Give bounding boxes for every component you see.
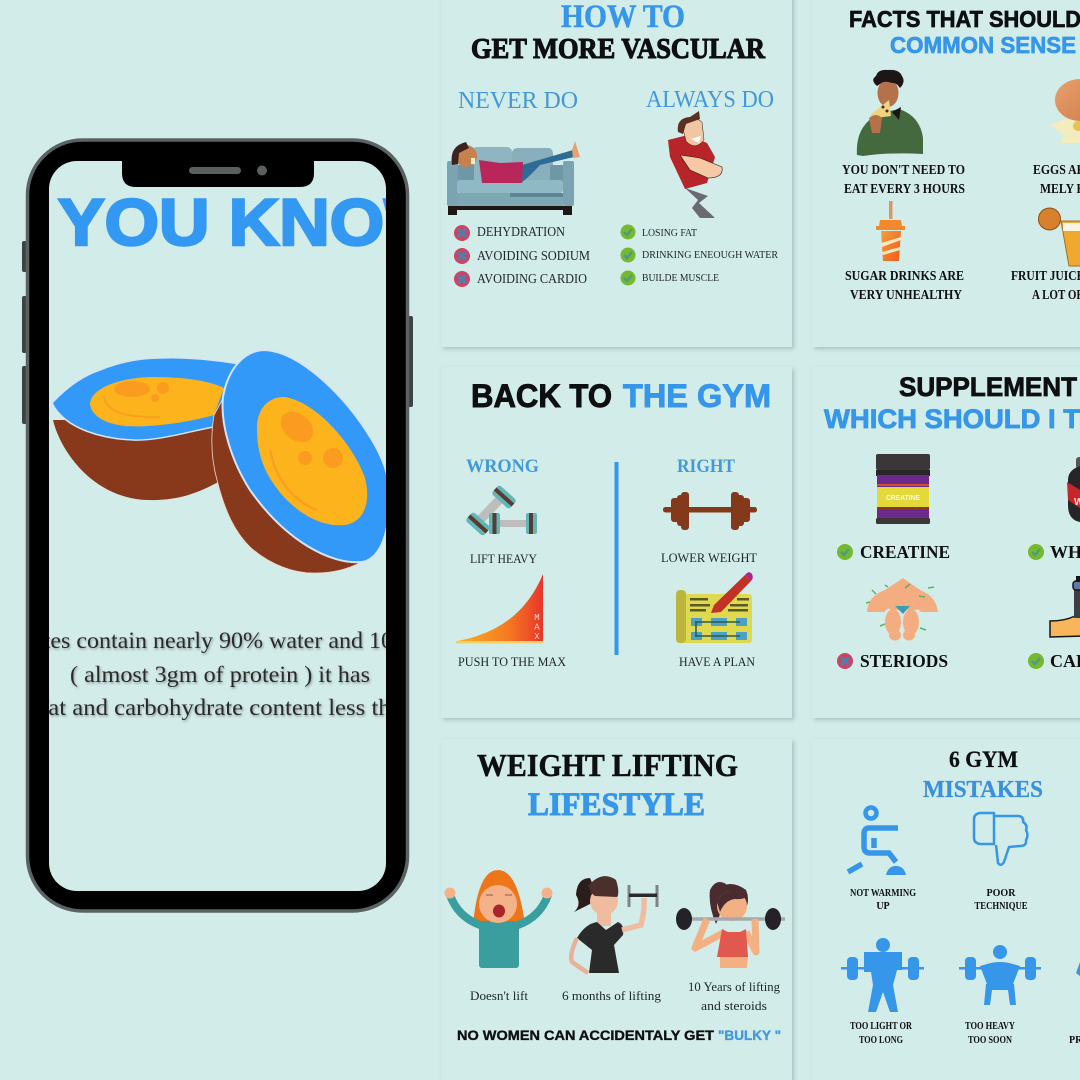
never do labels: DEHYDRATION bbox=[477, 225, 565, 240]
chart: max ramp bbox=[456, 574, 543, 644]
never do labels: AVOIDING SODIUM bbox=[477, 249, 590, 264]
illustration: soda cup bbox=[876, 201, 905, 261]
text: poor technique bbox=[974, 888, 1028, 912]
list: always do bbox=[620, 224, 779, 286]
illustration: woman after 10 years bbox=[676, 882, 785, 968]
illustration: steroid body bbox=[866, 578, 938, 640]
icon: lifter too heavy bbox=[959, 945, 1041, 1005]
heading: HOW TO bbox=[561, 0, 685, 35]
column headings bbox=[466, 456, 735, 477]
text: no need to eat every 3 hours bbox=[842, 163, 965, 197]
illustration: man eating pizza bbox=[857, 70, 923, 156]
text: sugar drinks bbox=[845, 269, 964, 303]
icon: barbell bbox=[663, 492, 757, 530]
phone body bbox=[28, 140, 408, 911]
icon: clipped lifter bbox=[1076, 962, 1080, 976]
phone screen content bbox=[49, 198, 386, 722]
panel: facts that should be common sense bbox=[812, 0, 1080, 347]
text: too heavy too soon bbox=[965, 1021, 1016, 1046]
panel background bbox=[812, 739, 1080, 1080]
icon: lifter too light bbox=[841, 938, 924, 1012]
heading bbox=[923, 747, 1043, 803]
illustration: halved egg bbox=[52, 350, 390, 573]
text: 10 years of lifting and steroids bbox=[688, 979, 780, 1013]
chart: max ramp: A bbox=[534, 622, 540, 632]
text: poor technique: POOR bbox=[987, 888, 1016, 899]
label: whey bbox=[1028, 542, 1080, 562]
text: too light or too long: TOO LIGHT OR bbox=[850, 1021, 913, 1032]
illustration: muscular man bbox=[668, 111, 722, 218]
illustration: fruit juice bbox=[1038, 208, 1080, 266]
text: 10 years of lifting and steroids: 10 Years of lifting bbox=[688, 979, 780, 994]
chart: max ramp: M bbox=[534, 613, 540, 623]
always do labels: LOSING FAT bbox=[642, 227, 697, 239]
heading: GET MORE VASCULAR bbox=[471, 33, 766, 65]
panel background bbox=[441, 367, 792, 718]
text: doesn't lift: Doesn't lift bbox=[470, 988, 528, 1003]
never do labels bbox=[477, 225, 590, 287]
phone notch bbox=[122, 160, 314, 187]
phone speaker bbox=[189, 167, 241, 174]
screen heading: YOU KNOW bbox=[58, 185, 451, 259]
heading: 6 GYM bbox=[949, 747, 1018, 772]
heading: THE GYM bbox=[623, 378, 771, 414]
heading: LIFESTYLE bbox=[528, 787, 705, 823]
heading: MISTAKES bbox=[923, 777, 1043, 803]
text: sugar drinks: SUGAR DRINKS ARE bbox=[845, 269, 964, 284]
panel background bbox=[441, 0, 792, 347]
illustration: egg bbox=[1050, 79, 1080, 143]
text: no need to eat every 3 hours: EAT EVERY 3 HOURS bbox=[844, 182, 965, 197]
chart: max ramp: X bbox=[534, 632, 540, 642]
heading: COMMON SENSE bbox=[890, 32, 1076, 58]
panel background bbox=[812, 0, 1080, 347]
text: not warming up bbox=[850, 888, 916, 912]
panel background bbox=[812, 367, 1080, 718]
never do items bbox=[454, 225, 470, 287]
illustration: arm with dumbbell bbox=[1050, 576, 1080, 637]
panel: 6 gym mistakes bbox=[812, 739, 1080, 1080]
text: too heavy too soon: TOO SOON bbox=[968, 1035, 1013, 1046]
text: lower weight: LOWER WEIGHT bbox=[661, 550, 757, 565]
phone camera bbox=[257, 166, 267, 176]
label: steroids: STERIODS bbox=[860, 651, 948, 671]
heading: BACK TO bbox=[471, 378, 612, 414]
icon: dumbbells bbox=[465, 485, 537, 536]
callout: no women get bulky: NO WOMEN CAN ACCIDENTALY GET bbox=[457, 1028, 715, 1043]
screen body text: ( almost 3gm of protein ) it has bbox=[70, 662, 370, 687]
icon: plan with pencil bbox=[676, 572, 753, 643]
text: not warming up: NOT WARMING bbox=[850, 888, 916, 899]
text: have a plan: HAVE A PLAN bbox=[679, 654, 756, 669]
text: too heavy too soon: TOO HEAVY bbox=[965, 1021, 1016, 1032]
heading bbox=[849, 6, 1080, 58]
list: never do bbox=[454, 225, 590, 287]
always do items bbox=[620, 224, 636, 286]
illustration: creatine jar: CREATINE bbox=[886, 493, 920, 502]
text: fruit juice bbox=[1011, 269, 1080, 303]
phone side buttons bbox=[22, 241, 413, 424]
text: too light or too long: TOO LONG bbox=[859, 1035, 903, 1046]
never do labels: AVOIDING CARDIO bbox=[477, 272, 587, 287]
panel background bbox=[441, 739, 792, 1080]
heading bbox=[471, 0, 766, 65]
column headings: RIGHT bbox=[677, 456, 735, 477]
panel: back to the gym bbox=[441, 367, 792, 718]
text: 6 months of lifting: 6 months of lifting bbox=[562, 988, 662, 1003]
column headings bbox=[458, 87, 774, 114]
always do labels: DRINKING ENEOUGH WATER bbox=[642, 249, 779, 261]
divider bbox=[614, 462, 618, 655]
text: poor technique: TECHNIQUE bbox=[974, 901, 1028, 912]
text: no need to eat every 3 hours: YOU DON'T NEED TO bbox=[842, 163, 965, 178]
illustration: woman after 6 months bbox=[571, 876, 657, 973]
screen body text bbox=[49, 632, 386, 722]
always do labels: BUILDE MUSCLE bbox=[642, 272, 719, 284]
illustration: man lying on sofa bbox=[447, 141, 580, 215]
illustration: woman who doesn't lift bbox=[444, 870, 552, 968]
heading bbox=[824, 372, 1080, 434]
callout: no women get bulky: "BULKY " bbox=[718, 1028, 781, 1043]
text: lift heavy: LIFT HEAVY bbox=[470, 551, 538, 566]
phone screen bbox=[49, 161, 386, 891]
heading: SUPPLEMENT bbox=[899, 372, 1077, 402]
column headings: WRONG bbox=[466, 456, 539, 477]
panel: weight lifting lifestyle bbox=[441, 739, 792, 1080]
text: too light or too long bbox=[850, 1021, 913, 1046]
heading: WHICH SHOULD I T bbox=[824, 404, 1080, 434]
label: carbs bbox=[1028, 651, 1080, 671]
heading bbox=[477, 747, 738, 823]
icon: thumbs down bbox=[974, 813, 1028, 865]
text: sugar drinks: VERY UNHEALTHY bbox=[850, 288, 962, 303]
text: 10 years of lifting and steroids: and steroids bbox=[701, 998, 767, 1013]
column headings: NEVER DO bbox=[458, 88, 578, 114]
icon: not warming up bbox=[848, 808, 906, 875]
column headings: ALWAYS DO bbox=[646, 87, 774, 113]
panel: how to get more vascular bbox=[441, 0, 792, 347]
label: creatine: CREATINE bbox=[860, 542, 950, 562]
heading bbox=[471, 378, 771, 414]
screen body text: fat and carbohydrate content less than bbox=[40, 695, 415, 720]
text: eggs are bbox=[1033, 163, 1080, 197]
illustration: creatine jar bbox=[876, 454, 930, 524]
illustration: whey jar bbox=[1067, 457, 1080, 522]
text: push to the max: PUSH TO THE MAX bbox=[458, 654, 567, 669]
always do labels bbox=[642, 227, 779, 284]
text: not warming up: UP bbox=[876, 901, 890, 912]
panel: supplements bbox=[812, 367, 1080, 718]
phone mockup bbox=[22, 138, 413, 913]
heading: WEIGHT LIFTING bbox=[477, 747, 738, 783]
